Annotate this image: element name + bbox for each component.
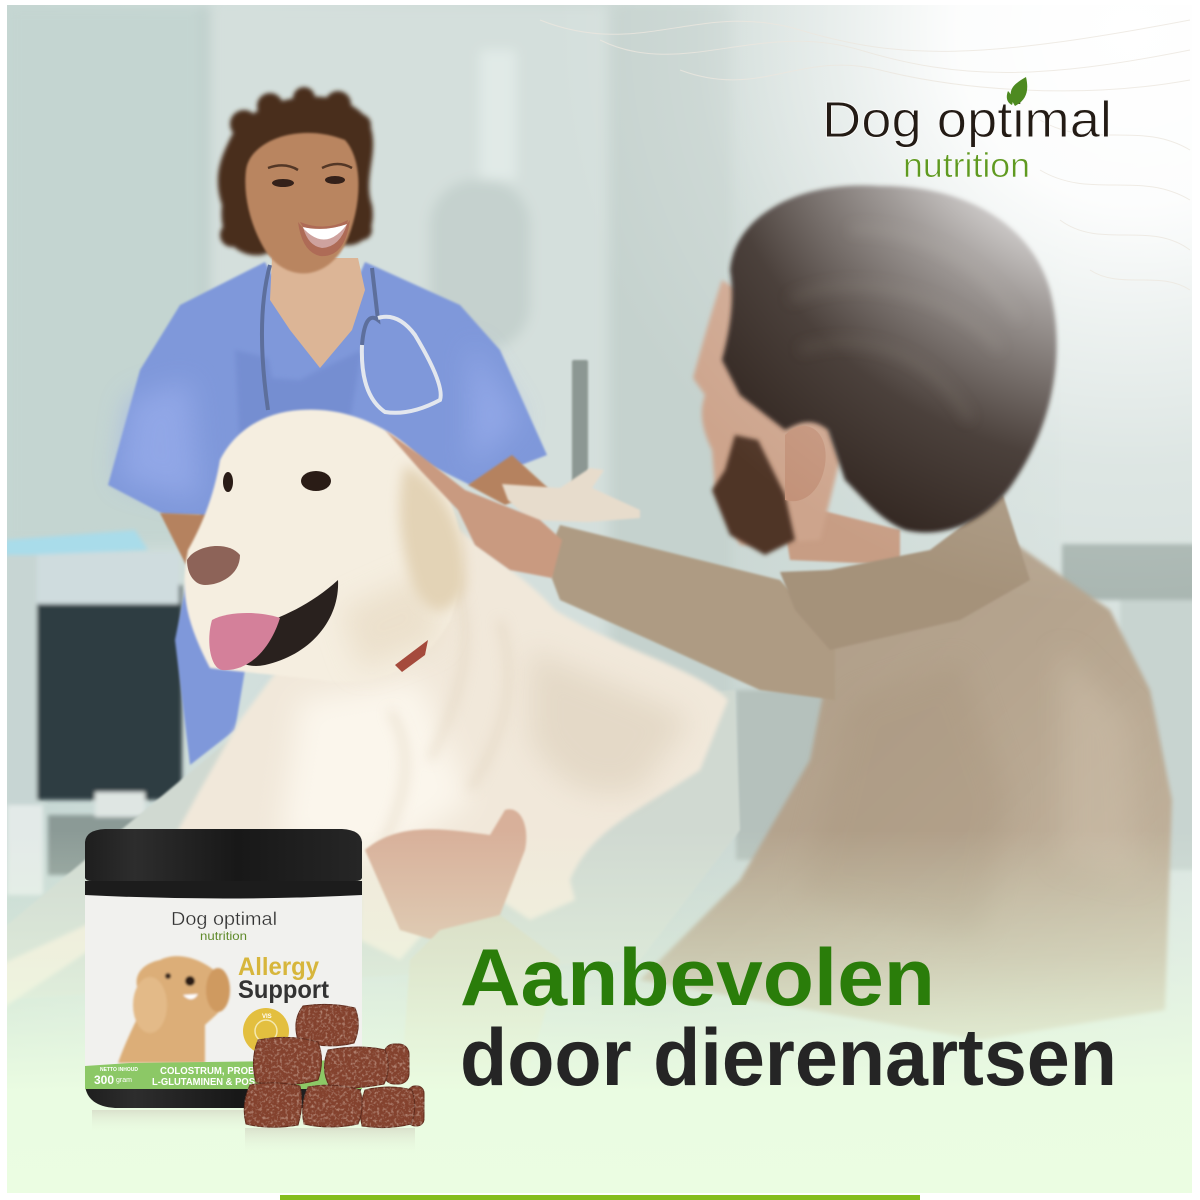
wave pattern xyxy=(540,20,1190,290)
jar green band xyxy=(85,1060,362,1089)
dog mouth xyxy=(222,580,338,666)
nurse face xyxy=(245,133,358,273)
dog tongue xyxy=(209,613,280,670)
nurse arm xyxy=(160,455,548,565)
door handle xyxy=(572,360,588,500)
right wall counter xyxy=(736,544,1200,870)
nurse hair xyxy=(218,87,373,255)
jar poodle xyxy=(118,956,230,1063)
product jar: nutrition xyxy=(200,929,247,943)
jar reflection xyxy=(92,1110,360,1134)
logo wordmark: Dog optimal xyxy=(822,91,1112,148)
sweater cuff xyxy=(400,915,560,1100)
man neck xyxy=(780,500,900,565)
headline line 2: door dierenartsen xyxy=(460,1013,1117,1103)
man beard xyxy=(712,435,795,555)
soft chews xyxy=(244,1004,424,1156)
nurse xyxy=(108,87,548,765)
product jar: COLOSTRUM, PROB xyxy=(160,1066,255,1077)
man's hand on dog xyxy=(385,430,562,578)
headline line 1: Aanbevolen xyxy=(460,933,935,1023)
jar label xyxy=(85,893,362,1068)
stethoscope xyxy=(262,265,378,410)
bottom fade xyxy=(7,830,1192,1193)
side table with towel xyxy=(5,530,182,895)
man torso xyxy=(640,540,1172,1040)
chew pieces xyxy=(244,1004,424,1128)
product jar: VIS xyxy=(262,1014,272,1020)
man xyxy=(545,185,1172,1040)
jar lid xyxy=(85,829,362,881)
nurse chest and neck xyxy=(270,258,365,368)
clinic back wall and door xyxy=(7,5,1200,705)
nurse scrubs xyxy=(108,262,547,765)
white glow xyxy=(7,5,1192,705)
man ear xyxy=(785,426,826,501)
gloved hand xyxy=(502,468,640,522)
product jar: L-GLUTAMINEN & POS xyxy=(152,1077,255,1088)
dog ear xyxy=(400,465,466,611)
chew reflections xyxy=(245,1128,415,1156)
dog head xyxy=(184,410,462,682)
bottom green bar xyxy=(280,1195,920,1200)
jar product name: Allergy xyxy=(238,953,319,981)
man's lower hand xyxy=(365,809,526,942)
jar logo: Dog optimal xyxy=(171,909,277,929)
man arm xyxy=(545,525,835,700)
golden retriever xyxy=(0,410,728,1010)
jar base xyxy=(85,1060,362,1108)
dog body xyxy=(0,500,728,1010)
man turtleneck xyxy=(780,495,1030,650)
product jar: gram xyxy=(116,1077,132,1084)
dog collar xyxy=(395,640,428,672)
man hair xyxy=(722,185,1057,533)
logo leaf xyxy=(1007,77,1027,106)
steel exam table xyxy=(0,690,740,1000)
dog nose xyxy=(187,546,240,585)
logo xyxy=(822,77,1112,185)
product jar xyxy=(85,829,362,1134)
man face xyxy=(693,280,840,545)
dog eyes xyxy=(301,471,331,491)
logo subtitle: nutrition xyxy=(903,147,1030,185)
product jar: Support xyxy=(238,976,330,1004)
jar band text: NETTO INHOUD xyxy=(100,1067,138,1073)
jar badge xyxy=(243,1008,289,1054)
headline xyxy=(460,933,1117,1103)
product jar: 300 xyxy=(94,1073,114,1087)
